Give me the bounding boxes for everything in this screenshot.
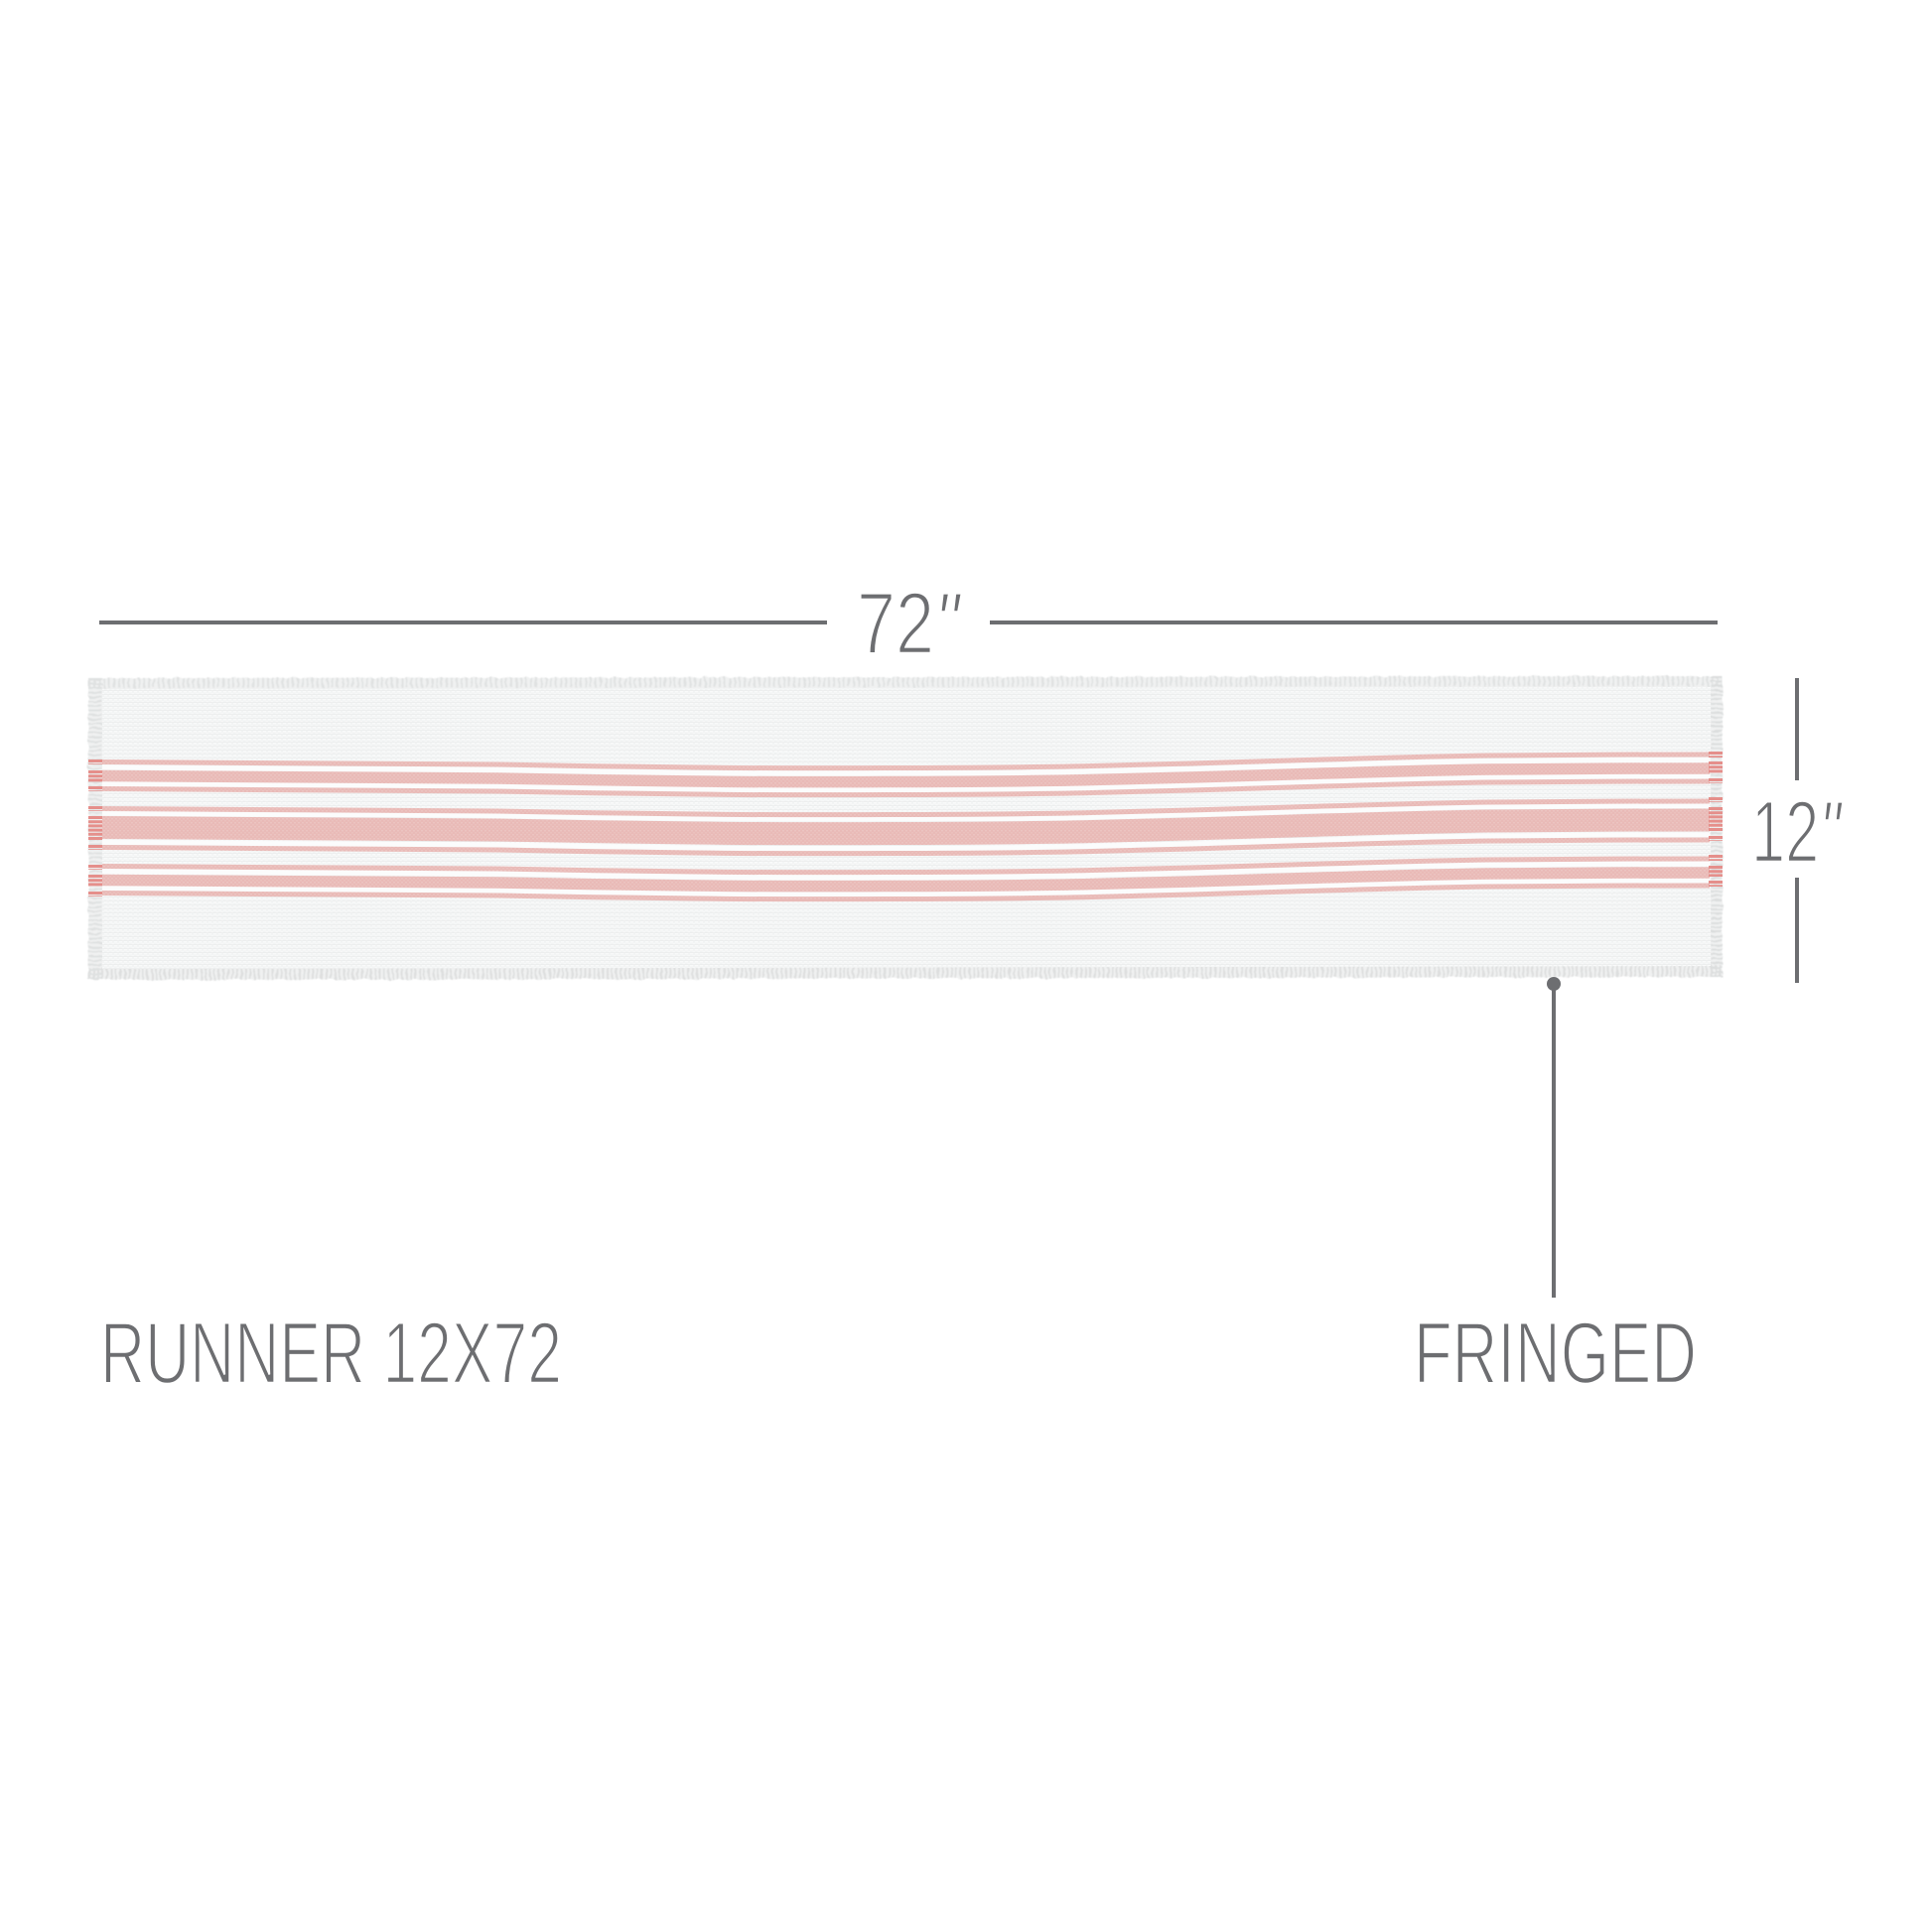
red fringe threads [95, 752, 1716, 897]
dimension: 12 inch height: 12" [1751, 782, 1844, 881]
label: runner size: RUNNER 12X72 [100, 1304, 562, 1402]
weave texture [102, 687, 1711, 969]
cloth body [102, 687, 1711, 969]
label: fringed: FRINGED [1414, 1304, 1697, 1402]
dimension: 12 inch height [1751, 678, 1844, 983]
white gaps between stripes [102, 760, 1710, 895]
dimension: 72 inch width [99, 574, 1718, 672]
stripe weave overlay [102, 745, 1711, 903]
dimension: 72 inch width: 72" [857, 574, 962, 672]
pink stripes [102, 755, 1710, 899]
fringe edges [88, 676, 1723, 980]
callout pointer: fringed [1547, 977, 1561, 1298]
panel: striped fringed table runner [88, 676, 1723, 980]
